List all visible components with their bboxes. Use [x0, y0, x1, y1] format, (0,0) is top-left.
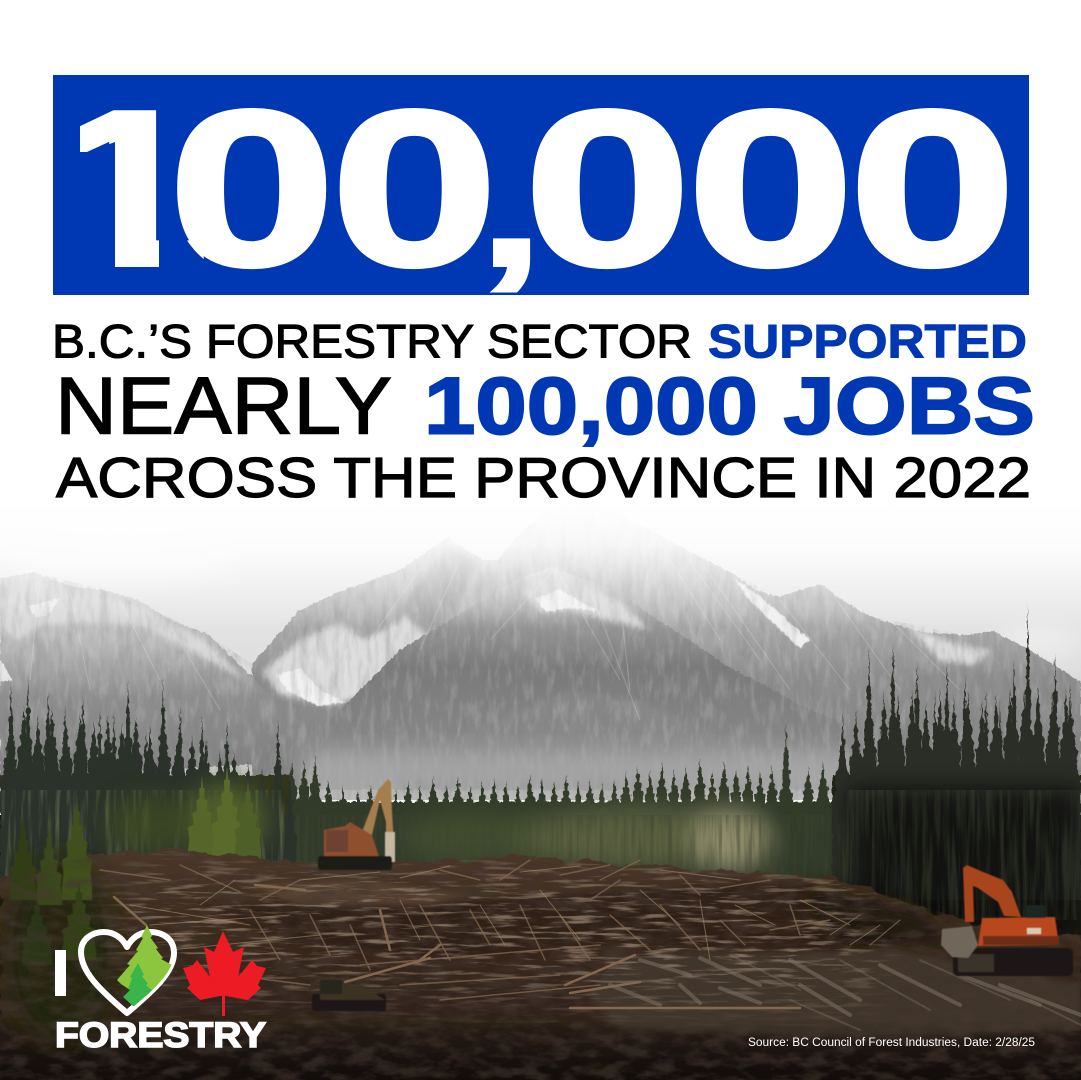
big number [80, 108, 1007, 292]
big number: 0 [524, 65, 692, 313]
logo wordmark: FORESTRY [55, 1016, 266, 1055]
text line 1: sector supported: SUPPORTED [708, 314, 1027, 368]
left forest [0, 677, 297, 880]
dark base behind forest and ground [0, 815, 1081, 1080]
text line 2: nearly 100,000 jobs: 100,000 JOBS [424, 362, 1035, 452]
front mountain [300, 567, 860, 790]
white fade over sky [0, 498, 1081, 628]
sky and clouds [0, 500, 1081, 800]
icon: maple leaf [183, 931, 266, 1016]
photo: forestry clearing with mountains [0, 498, 1081, 1080]
dark cut face [200, 880, 900, 960]
text line 2: nearly 100,000 jobs: NEARLY [55, 362, 392, 452]
rock texture on mountains [0, 568, 1081, 800]
trunk texture on right forest [835, 790, 1081, 920]
big number: 1 [41, 65, 209, 313]
sunlit haze over mid trees [290, 808, 830, 880]
big number: 0 [687, 65, 855, 313]
mud ruts [610, 955, 1081, 1030]
headline banner: 100,000 [53, 75, 1029, 295]
ground: cut clearing [0, 795, 1081, 1080]
bulldozer in the foreground [312, 976, 386, 1011]
lighter top surface [250, 880, 470, 905]
big number: 0 [168, 65, 336, 313]
trunk texture on left forest [0, 790, 285, 880]
text line 2: nearly 100,000 jobs [55, 362, 1035, 452]
big number: 0 [849, 65, 1017, 313]
icon: heart with trees [81, 925, 174, 1013]
excavator: far machine [318, 779, 395, 870]
logo: I love forestry [55, 925, 266, 1055]
source note: Source: BC Council of Forest Industries, Date: 2/28/25 [748, 1037, 1035, 1049]
text line 3: across the province: ACROSS THE PROVINCE IN 2022 [56, 446, 1031, 510]
dark forest floor on the right [850, 790, 1081, 940]
left mountain [0, 572, 320, 780]
dirt textures [0, 830, 1081, 1080]
big number: 0 [330, 65, 498, 313]
big number: , [480, 116, 542, 300]
sunlit green young trees on the left [105, 765, 267, 860]
back mountains [252, 505, 1081, 790]
right forest [832, 603, 1081, 945]
excavator: near orange machine [941, 865, 1073, 976]
dark foreground soil [0, 1020, 1081, 1080]
muddy track [590, 950, 1081, 1040]
text line 1: sector supported: B.C.’S FORESTRY SECTOR [52, 314, 692, 368]
felled logs and slash [100, 860, 900, 1008]
valley haze [300, 752, 850, 788]
green-dark undergrowth, left [2, 795, 118, 1045]
letter I [55, 950, 66, 996]
text line 1: sector supported [52, 314, 1027, 368]
mid treeline [270, 723, 850, 890]
